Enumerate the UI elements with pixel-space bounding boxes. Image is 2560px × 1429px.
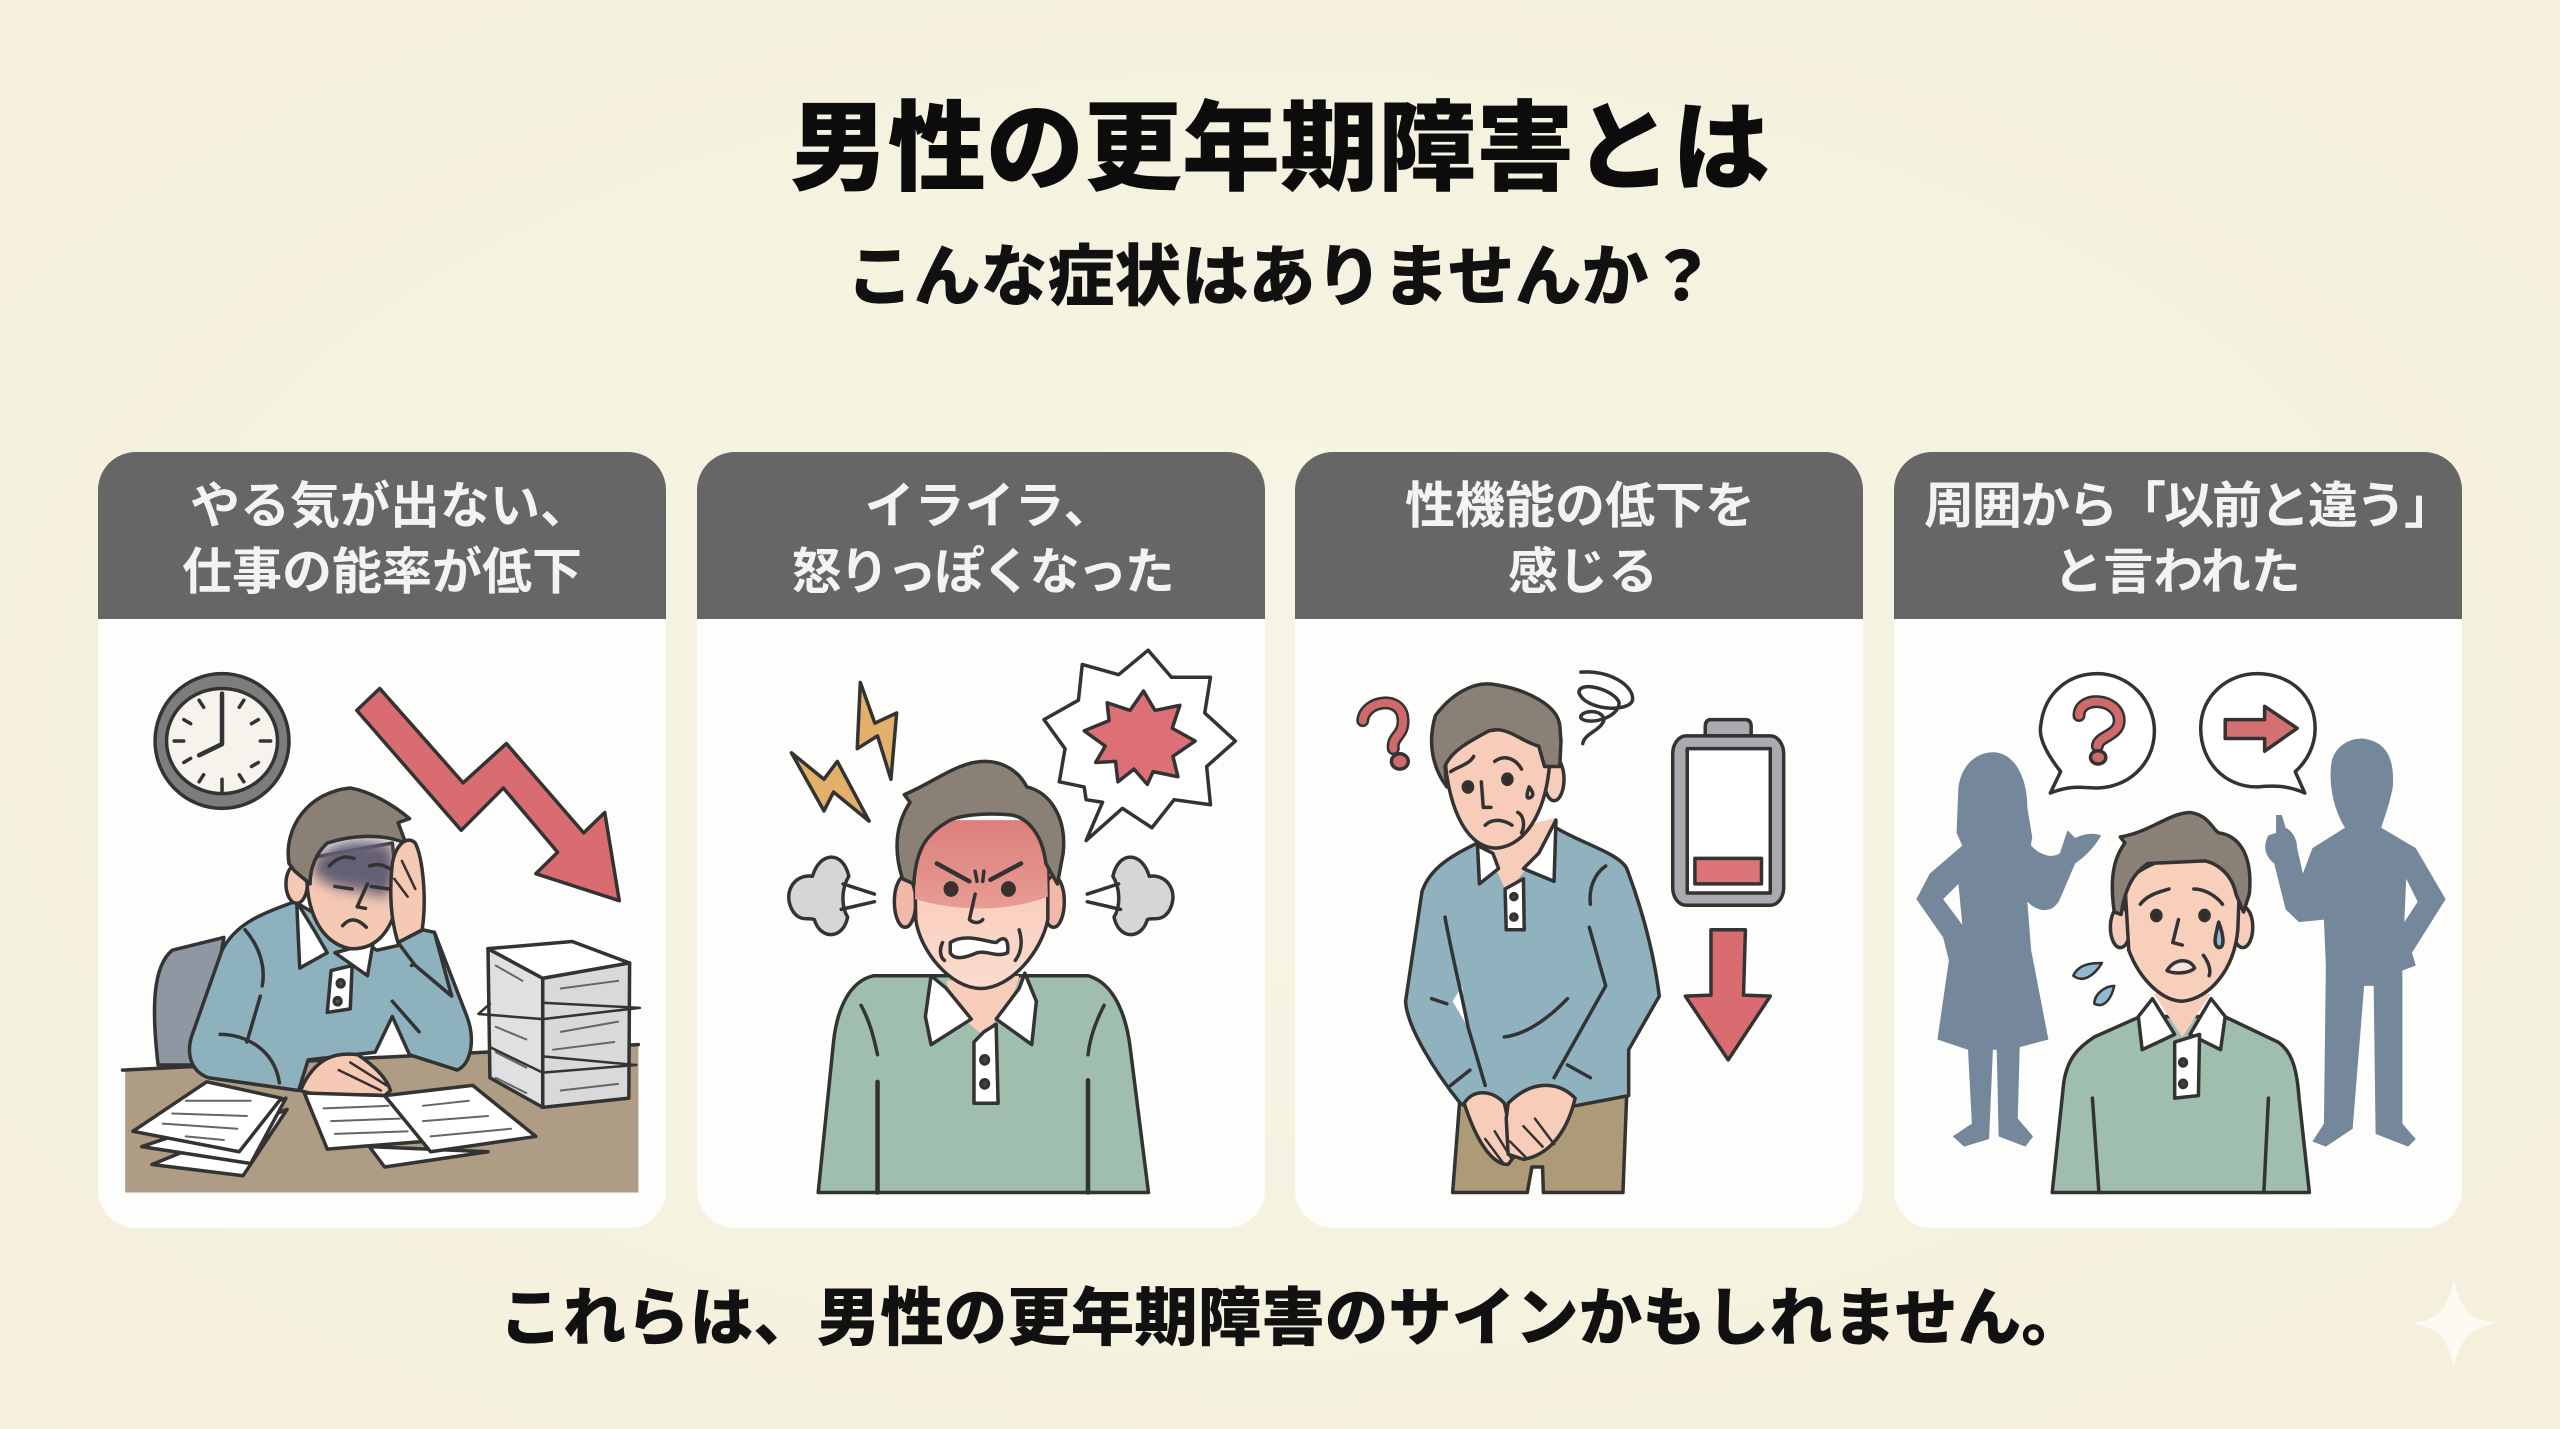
- icon: question mark: [1363, 703, 1408, 769]
- icon: anger speech burst: [1044, 650, 1235, 841]
- card heading: 怒りっぽくなった: [792, 544, 1172, 600]
- paper stack: [478, 942, 640, 1107]
- illustration: worried man and empty battery: [1363, 672, 1784, 1193]
- man head anxious: [2110, 812, 2253, 1001]
- card heading: イライラ、: [864, 478, 1114, 534]
- illustration: tired man at desk: [123, 674, 640, 1193]
- panel: low motivation: [98, 452, 666, 1228]
- man pants: [1453, 1093, 1627, 1193]
- man sweater: [1406, 818, 1659, 1108]
- card heading: 性機能の低下を: [1405, 478, 1755, 534]
- icon: sweat drops: [2073, 963, 2114, 1005]
- man sweater: [818, 973, 1148, 1193]
- panel: others say changed: [1894, 452, 2462, 1228]
- man head angry: [894, 761, 1064, 988]
- subtitle: こんな症状はありませんか？: [846, 240, 1716, 315]
- card background: [1295, 452, 1863, 1228]
- desk: [125, 1045, 638, 1193]
- card heading: 感じる: [1508, 544, 1658, 600]
- arrow: down: [1685, 930, 1770, 1060]
- panel: sexual function decline: [1295, 452, 1863, 1228]
- panel: irritability: [697, 452, 1265, 1228]
- card header band: [1295, 452, 1863, 619]
- icon: dizzy spiral: [1579, 672, 1633, 744]
- title: 男性の更年期障害とは: [790, 93, 1770, 203]
- man head: [286, 788, 452, 996]
- silhouette: woman: [1916, 752, 2101, 1147]
- card heading: 周囲から「以前と違う」: [1924, 478, 2452, 534]
- chair: [154, 937, 224, 1065]
- icon: low battery: [1673, 720, 1784, 905]
- silhouette: man: [2265, 738, 2446, 1147]
- arrow: declining red zigzag: [357, 688, 619, 901]
- man sweater: [2052, 994, 2309, 1193]
- card background: [1894, 452, 2462, 1228]
- icon: wall clock: [155, 674, 289, 808]
- card background: [98, 452, 666, 1228]
- icon: sparkle watermark: [2411, 1278, 2498, 1368]
- papers on desk: [133, 1082, 536, 1176]
- card header band: [697, 452, 1265, 619]
- icon: lightning bolts: [791, 682, 897, 821]
- icon: speech bubble arrow: [2201, 674, 2315, 793]
- man body: [190, 902, 471, 1096]
- card header band: [98, 452, 666, 619]
- card heading: と言われた: [2053, 544, 2301, 600]
- card heading: 仕事の能率が低下: [182, 544, 582, 600]
- card heading: やる気が出ない、: [190, 478, 590, 534]
- icon: speech bubble question: [2040, 674, 2154, 793]
- illustration: angry man: [789, 650, 1235, 1193]
- man hands: [1464, 1085, 1575, 1164]
- closing message: これらは、男性の更年期障害のサインかもしれません。: [499, 1284, 2085, 1354]
- illustration: man between two people: [1916, 674, 2446, 1193]
- man head worried: [1432, 684, 1564, 848]
- card background: [697, 452, 1265, 1228]
- icon: steam puffs: [789, 857, 1173, 935]
- card header band: [1894, 452, 2462, 619]
